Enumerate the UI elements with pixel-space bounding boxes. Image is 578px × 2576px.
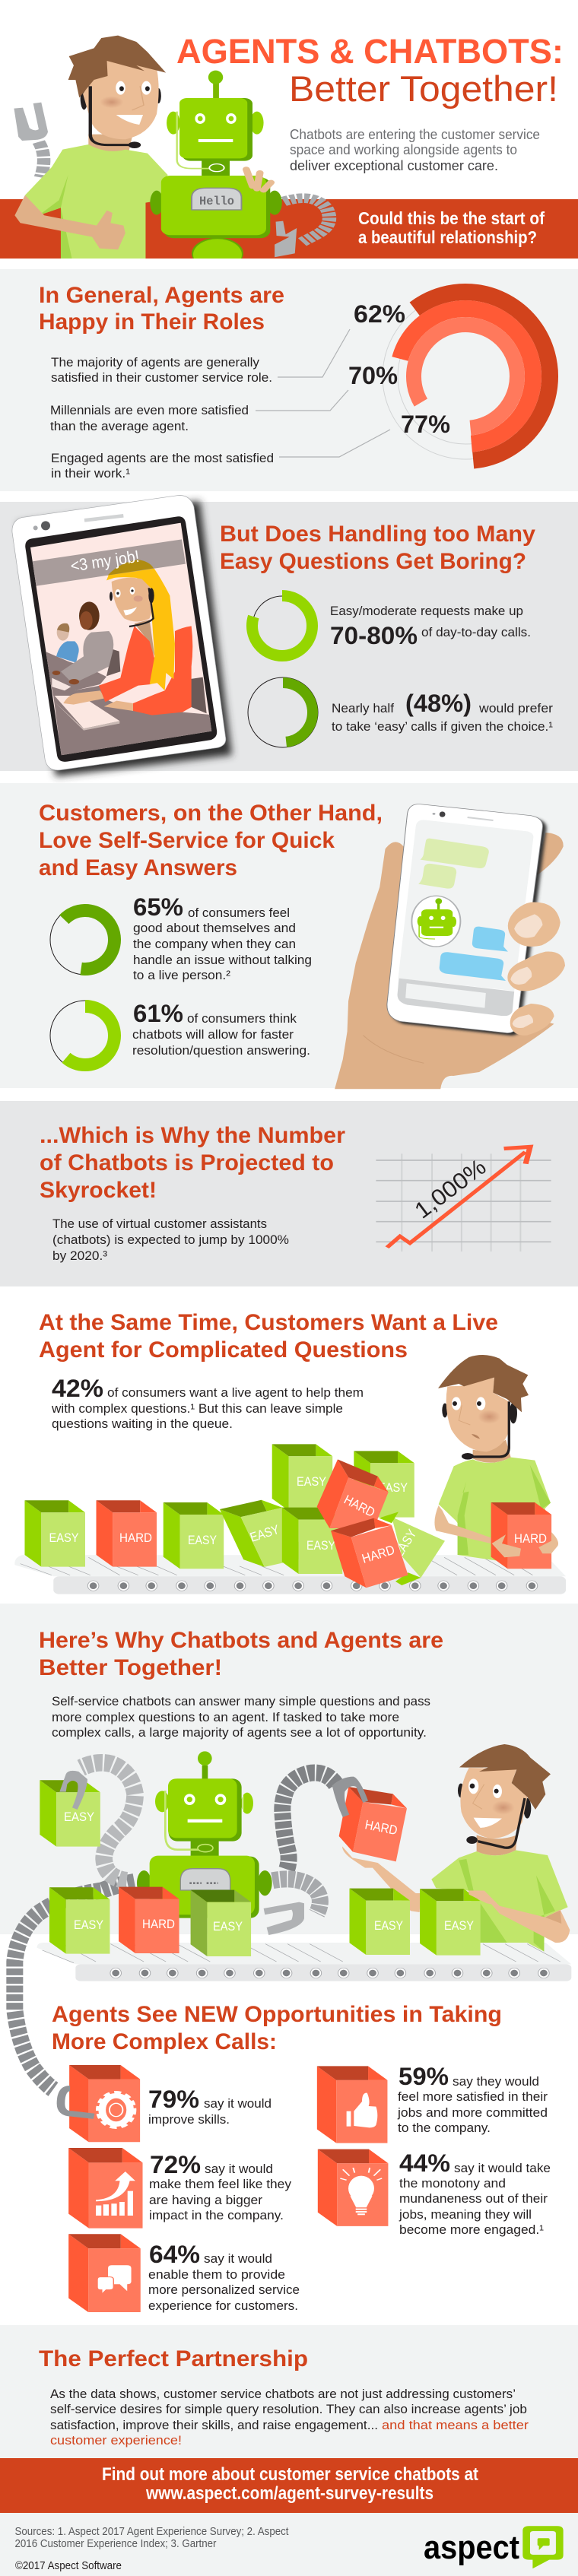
stat: 44%: jobs, meaning they will [399,2207,532,2222]
satisfaction text: satisfied in their customer service role. [51,370,272,385]
percentages [348,300,450,438]
panel: customers want a live agent [14,1310,566,1594]
footer background [0,2513,578,2576]
icon box: more satisfied [317,2066,387,2143]
header red band [0,199,578,259]
body text: by 2020.³ [52,1248,107,1263]
stat: 59%: feel more satisfied in their [398,2089,548,2104]
pile of question boxes [24,1444,551,1574]
stat: 42%: of consumers want a live agent to help them [107,1385,364,1400]
robot label: Hello: Hello [199,195,234,208]
stat: 44%: say it would take [454,2161,551,2175]
hard box lifted by magnet [332,1777,407,1861]
percentages: 70% [348,362,398,389]
call to action band [0,2458,578,2513]
panel background [0,783,578,1088]
labels on back boxes: EASY [248,1522,281,1545]
robot upper-left arm [81,1762,135,1880]
stat: 72%: say it would [205,2162,273,2176]
panel: easy questions [0,496,578,776]
box row and easy box with magnet [40,1780,481,1956]
box labels: HARD [364,1817,399,1838]
panel: header [0,32,578,271]
chart label: 1,000% [410,1154,491,1224]
falling hard boxes and holding hands [317,1459,558,1588]
logo: aspect: aspect [424,2529,519,2566]
stat: 42%: questions waiting in the queue. [52,1416,233,1431]
panel background [0,1604,578,1934]
body text: complex calls, a large majority of agents see a lot of opportunity. [52,1725,427,1740]
heading: Better Together! [39,1655,222,1680]
stat: 59%: jobs and more committed [397,2105,548,2120]
stat: 48% [332,690,553,734]
stat: 72%: impact in the company. [149,2208,284,2222]
sources [15,2525,289,2550]
body text [52,1694,430,1740]
stat: 65%: 65% [133,893,183,921]
panel: agents happy in their roles [0,259,578,494]
stat: 42% [51,1375,364,1431]
panel: chatbots skyrocket [0,1101,578,1286]
leader lines [256,329,390,457]
labels on falling boxes [341,1493,396,1566]
stat: 70-80% [330,604,531,649]
heading: In General, Agents are [39,283,284,308]
stat: 48%: would prefer [478,701,553,715]
donut: 48% [248,677,318,747]
chart: growth arrow [376,1147,551,1252]
body text: satisfaction, improve their skills, and raise engagement... [50,2418,378,2432]
sources: 2016 Customer Experience Index; 3. Gartner [15,2537,216,2550]
stat: 59% [397,2063,548,2135]
labels on back boxes: EASY [49,1531,79,1545]
robot body [137,1751,272,1918]
body text [50,2387,529,2448]
stat: 44%: the monotony and [399,2176,506,2191]
stat: 59%: say they would [453,2074,539,2089]
panel: the perfect partnership [0,2325,578,2458]
heading [39,1628,443,1680]
stat: 59%: to the company. [398,2121,491,2135]
heading: At the Same Time, Customers Want a Live [39,1310,498,1335]
illustration: tablet with agents [12,496,226,770]
call to action band: www.aspect.com/agent-survey-results [145,2483,434,2504]
stat: 61%: chatbots will allow for faster [132,1027,294,1042]
stat: 70-80%: Easy/moderate requests make up [330,604,523,618]
panel background [0,502,578,771]
robot with segmented arms [14,1751,336,2089]
heading: and Easy Answers [39,855,237,880]
stat: 44%: 44% [399,2149,450,2177]
intro text [290,127,540,173]
stat: 72%: are having a bigger [149,2193,262,2207]
stat: 61%: 61% [133,1000,183,1027]
icon box: improve skills [61,2065,140,2142]
band question [358,208,545,247]
body text: As the data shows, customer service chatbots are not just addressing customers’ [50,2387,516,2401]
intro text: Chatbots are entering the customer service [290,127,540,142]
title: Better Together! [289,68,558,109]
stat: 72%: 72% [150,2151,201,2178]
icon box: personalized service [68,2234,141,2312]
labels on back boxes [49,1474,547,1560]
body text: customer experience! [50,2433,182,2448]
stat: 61%: resolution/question answering. [132,1043,310,1058]
satisfaction text: Millennials are even more satisfied [50,403,249,417]
heading [39,801,383,880]
labels on back boxes: EASY [306,1538,335,1553]
satisfaction text [50,355,274,481]
band question: a beautiful relationship? [358,227,537,247]
stat: 65%: to a live person.² [133,968,230,982]
heading [220,522,535,574]
stat: 79% [148,2086,272,2127]
body text: and that means a better [382,2418,529,2432]
body text: more complex questions to an agent. If tasked to take more [52,1710,399,1724]
title [176,32,564,109]
heading: Easy Questions Get Boring? [220,549,526,574]
stat: 48%: (48%) [405,690,472,717]
stat: 65%: handle an issue without talking [133,953,312,967]
stat: 65%: the company when they can [133,937,296,951]
box labels: EASY [374,1918,403,1933]
box labels: EASY [213,1919,243,1934]
leaning easy box [379,1512,445,1585]
icon box: more engaged [318,2149,388,2226]
call to action band: Find out more about customer service chatbots at [102,2464,478,2485]
panel: customers love self-service [0,783,578,1089]
panel: footer [0,2513,578,2576]
intro text: deliver exceptional customer care. [290,158,498,173]
stat: 64%: more personalized service [148,2283,300,2297]
long robot arm reaching to next section [14,1882,135,2089]
agent figure [14,36,168,259]
robot figure [150,71,329,271]
stat: 42%: with complex questions.¹ But this can leave simple [51,1401,343,1416]
labels on back boxes: HARD [514,1531,547,1546]
stat: 64%: 64% [149,2241,200,2268]
donut: 61% [50,1001,120,1071]
heading: Customers, on the Other Hand, [39,801,383,826]
stat: 79%: 79% [148,2086,199,2113]
sources: Sources: 1. Aspect 2017 Agent Experience Survey; 2. Aspect [15,2525,289,2538]
heading: Agent for Complicated Questions [39,1337,408,1363]
labels on falling boxes: HARD [360,1543,396,1566]
heading: Agents See NEW Opportunities in Taking [52,2002,502,2027]
stat: 79%: improve skills. [148,2112,230,2127]
stat: 72% [149,2151,292,2222]
stat: 48%: to take ‘easy’ calls if given the choice.¹ [332,719,553,734]
robot lower-right arm and magnet [264,1879,320,1935]
labels on back boxes: EASY [391,1527,420,1560]
agent: worried [434,1355,551,1569]
box labels: EASY [64,1810,94,1824]
body text: Self-service chatbots can answer many simple questions and pass [52,1694,430,1708]
stat: 44%: become more engaged.¹ [399,2222,544,2237]
title: AGENTS & CHATBOTS: [176,32,564,71]
stat: 79%: say it would [204,2096,272,2111]
conveyor belt [37,1943,571,1981]
donut: 70-80% [252,596,312,655]
icon box: bigger impact [68,2148,143,2229]
panel: new opportunities [52,2002,551,2313]
stat: 64%: experience for customers. [148,2298,298,2313]
satisfaction text: in their work.¹ [51,466,130,481]
stat: 44%: mundaneness out of their [399,2191,548,2206]
heading: ...Which is Why the Number [40,1123,345,1148]
radial chart [348,259,578,494]
panel: better together [0,1604,578,2089]
labels on back boxes: EASY [188,1533,217,1547]
stat: 72%: make them feel like they [149,2177,292,2191]
body text: The use of virtual customer assistants [52,1217,267,1231]
heading [39,1310,498,1363]
heading: Here’s Why Chatbots and Agents are [39,1628,443,1653]
stat: 65%: good about themselves and [133,921,296,935]
robot arm left [14,103,48,177]
heading: of Chatbots is Projected to [40,1150,334,1175]
box labels: HARD [142,1917,175,1931]
heading: More Complex Calls: [52,2029,277,2054]
stat: 70-80%: 70-80% [330,622,418,649]
magnet on easy box and agent hand [59,1771,500,1906]
satisfaction text: The majority of agents are generally [51,355,259,370]
stat: 42%: 42% [52,1375,103,1402]
illustration: hand holding phone [335,804,565,1089]
tablet shadow [18,501,232,776]
stat: 61%: of consumers think [187,1011,297,1026]
tablet caption: <3 my job! [69,547,141,576]
copyright: ©2017 Aspect Software [15,2559,122,2572]
stat: 61% [132,1000,310,1058]
heading [52,2002,502,2054]
body text: (chatbots) is expected to jump by 1000% [52,1232,289,1247]
body text: self-service desires for simple query resolution. They can also increase agents’ job [50,2402,527,2416]
illustration: agent and robot [14,36,329,271]
stat: 59%: 59% [399,2063,449,2090]
satisfaction text: Engaged agents are the most satisfied [51,451,274,465]
stat: 64%: say it would [204,2251,272,2266]
stat: 48%: Nearly half [332,701,394,715]
intro text: space and working alongside agents to [290,142,517,157]
logo: aspect [424,2526,564,2568]
satisfaction text: than the average agent. [50,419,189,433]
stat: 64%: enable them to provide [148,2267,285,2282]
percentages: 62% [354,300,405,328]
box labels [64,1810,474,1934]
icon boxes [61,2065,388,2312]
panel background [0,2325,578,2458]
robot right arm [282,1773,336,1870]
labels on back boxes: EASY [378,1480,408,1495]
panel background [0,269,578,491]
heading: Skyrocket! [40,1178,157,1203]
stat: 64% [148,2241,300,2313]
body text [52,1217,289,1263]
percentages: 77% [401,411,450,438]
stat: 65%: of consumers feel [188,906,290,920]
heading: Happy in Their Roles [39,309,265,335]
labels on back boxes: EASY [297,1474,326,1489]
panel background [0,1101,578,1286]
labels on back boxes: HARD [119,1531,152,1545]
conveyor belt [14,1555,566,1594]
labels on falling boxes: HARD [341,1493,377,1520]
stat: 44% [399,2149,551,2237]
heading: Love Self-Service for Quick [39,828,335,853]
heading: But Does Handling too Many [220,522,535,547]
heading: The Perfect Partnership [39,2346,308,2371]
heading [39,283,284,335]
box labels: EASY [74,1918,103,1932]
stat: 65% [133,893,312,982]
box labels: EASY [444,1918,474,1933]
donut: 65% [44,899,126,981]
stat: 70-80%: of day-to-day calls. [421,625,531,639]
agent handling hard questions [342,1744,570,1952]
heading [40,1123,345,1203]
band question: Could this be the start of [358,208,545,228]
